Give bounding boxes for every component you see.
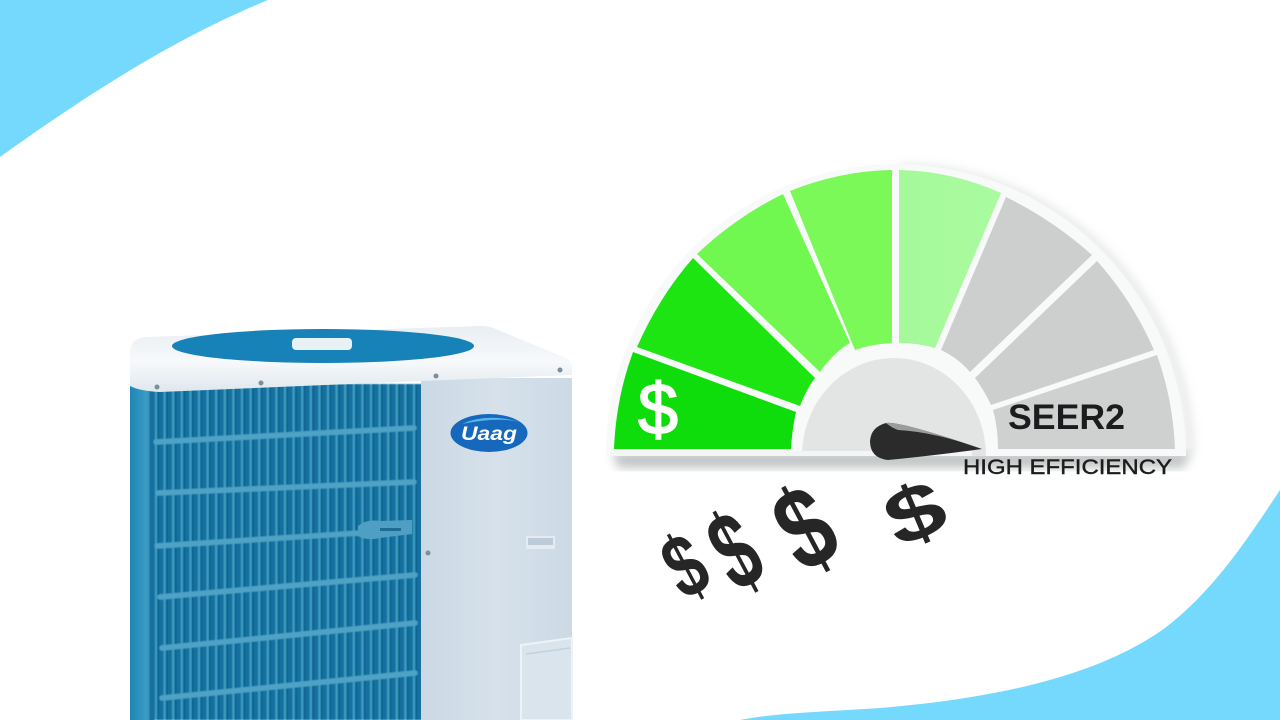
segment 8 xyxy=(993,355,1175,449)
top lid xyxy=(130,326,572,392)
segment 3 xyxy=(697,194,850,372)
gauge base line xyxy=(610,451,972,456)
gauge outer white rim xyxy=(606,164,1186,456)
gauge drop shadow xyxy=(612,452,1190,468)
background corner: bottom right wave xyxy=(740,490,1280,720)
coil side edge xyxy=(130,380,154,720)
SEER2 label: SEER2 xyxy=(1008,398,1125,437)
high efficiency label: HIGH EFFICIENCY xyxy=(963,456,1172,479)
dollar sign on green segment: $ xyxy=(638,370,678,450)
efficiency gauge xyxy=(606,164,1190,479)
side panel lower access door xyxy=(521,638,572,720)
fan disc xyxy=(172,329,474,363)
side panel vent xyxy=(526,536,555,549)
segment 1 xyxy=(614,352,796,449)
grille bars xyxy=(156,428,415,698)
dollar sign 2: $ xyxy=(688,487,781,615)
segment 5 xyxy=(899,170,1001,348)
dollar sign 3: $ xyxy=(752,458,857,597)
dollar signs row xyxy=(645,458,959,619)
air conditioner unit xyxy=(130,326,572,720)
side panel xyxy=(421,378,572,720)
gauge rim shadow xyxy=(900,168,1190,456)
segment 4 xyxy=(790,170,892,350)
background corner: top left wave xyxy=(0,0,268,157)
coil grille xyxy=(150,384,422,720)
segment 2 xyxy=(637,258,815,406)
dollar sign 1: $ xyxy=(645,513,724,619)
segment 7 xyxy=(975,261,1154,405)
brand logo badge xyxy=(450,414,528,452)
fan cap xyxy=(292,338,352,350)
segment 6 xyxy=(941,197,1092,372)
brand logo badge: Uaag xyxy=(461,424,517,445)
dollar sign 4: $ xyxy=(871,462,959,564)
gauge hub xyxy=(802,358,986,456)
grille handle xyxy=(358,520,412,539)
gauge needle xyxy=(870,423,982,460)
lid screws xyxy=(154,368,562,556)
